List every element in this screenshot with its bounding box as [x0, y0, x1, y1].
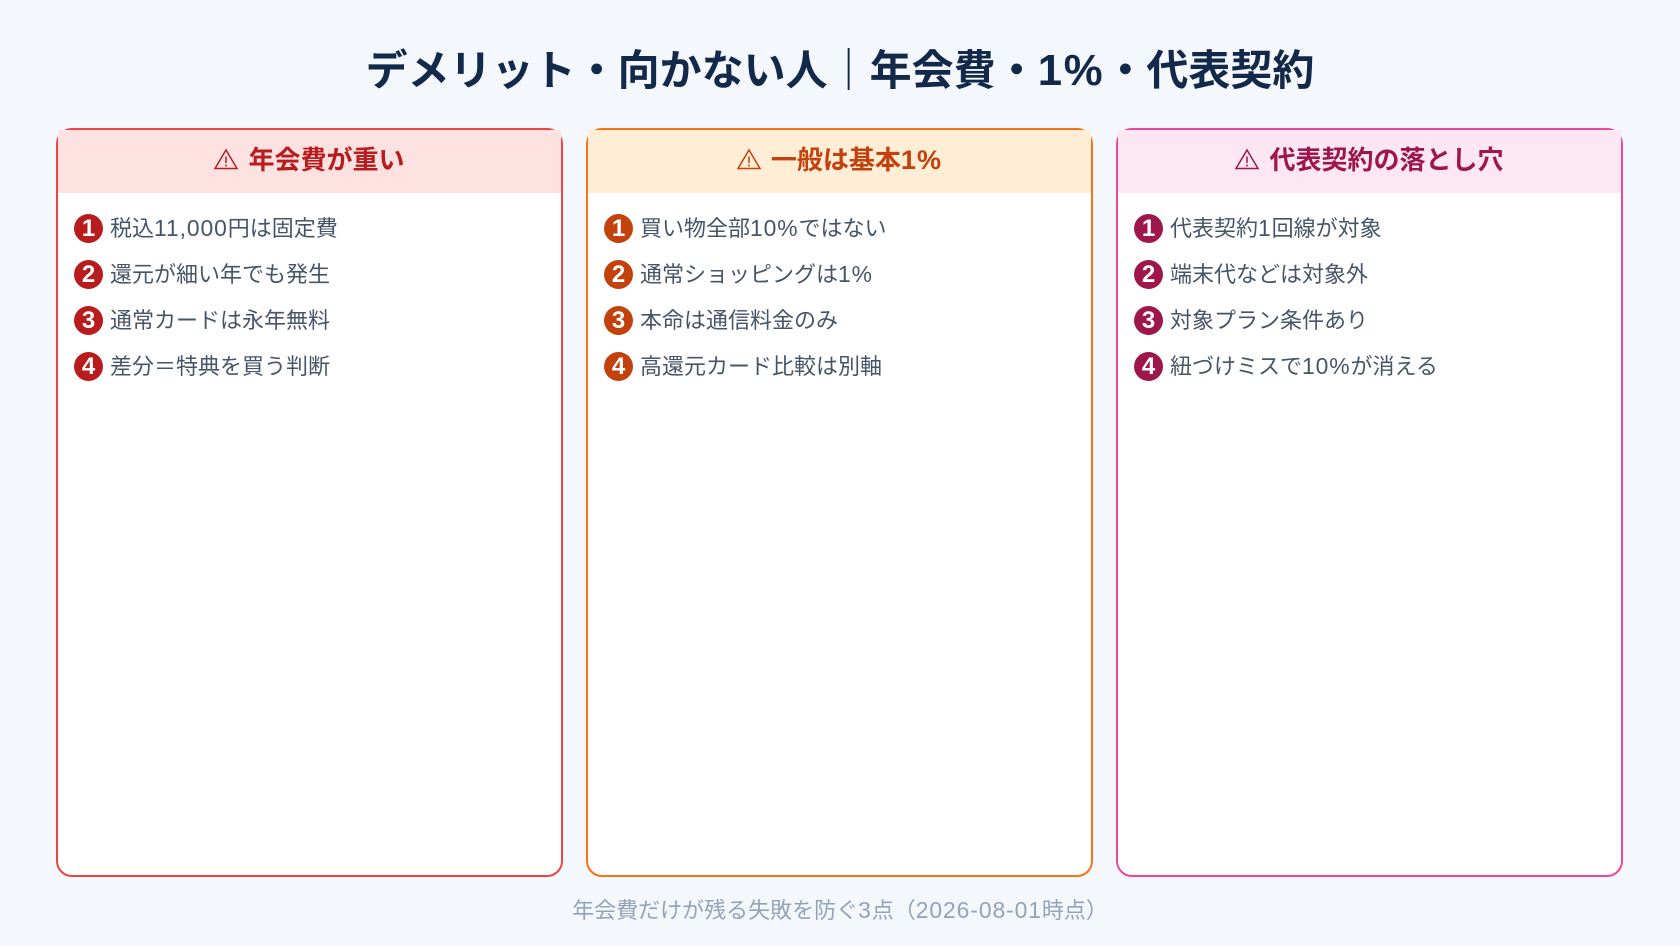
heading: representative contract: 代表契約の落とし穴 — [1269, 145, 1504, 175]
list: representative contract items — [1134, 214, 1438, 381]
item 1: 1 — [82, 215, 95, 242]
item 1: 1 — [1142, 215, 1155, 242]
item 2: 2 — [1142, 261, 1155, 288]
item 1: 1 — [612, 215, 625, 242]
list: annual fee items — [74, 214, 338, 381]
item 4: 4 — [82, 353, 95, 380]
item 3: 本命は通信料金のみ — [640, 308, 838, 333]
heading: annual fee — [58, 130, 561, 193]
heading: representative contract — [1118, 130, 1621, 193]
item 3: 通常カードは永年無料 — [110, 308, 330, 333]
item 1: 税込11,000円は固定費 — [110, 215, 338, 241]
item 2: 通常ショッピングは1% — [640, 261, 873, 287]
item 3: 3 — [612, 307, 625, 334]
panel: representative contract — [1116, 128, 1623, 877]
item 3: 3 — [1142, 307, 1155, 334]
item 2: 端末代などは対象外 — [1170, 262, 1368, 287]
heading: base rate: 一般は基本1% — [771, 145, 942, 175]
item 1: 買い物全部10%ではない — [640, 215, 887, 241]
item 2: 2 — [612, 261, 625, 288]
item 4: 高還元カード比較は別軸 — [640, 354, 882, 379]
item 1: 代表契約1回線が対象 — [1170, 215, 1382, 241]
list: base rate items — [604, 214, 887, 381]
item 2: 2 — [82, 261, 95, 288]
item 4: 4 — [1142, 353, 1155, 380]
panel: base rate — [586, 128, 1093, 877]
item 4: 紐づけミスで10%が消える — [1170, 353, 1438, 379]
item 3: 対象プラン条件あり — [1170, 308, 1368, 333]
panel: annual fee — [56, 128, 563, 877]
title: デメリット・向かない人｜年会費・1%・代表契約 — [366, 46, 1314, 95]
footer note: 年会費だけが残る失敗を防ぐ3点（2026-08-01時点） — [572, 897, 1108, 923]
item 2: 還元が細い年でも発生 — [110, 262, 330, 287]
item 4: 4 — [612, 353, 625, 380]
heading: base rate — [588, 130, 1091, 193]
item 4: 差分＝特典を買う判断 — [110, 354, 330, 379]
item 3: 3 — [82, 307, 95, 334]
heading: annual fee: 年会費が重い — [248, 145, 404, 175]
